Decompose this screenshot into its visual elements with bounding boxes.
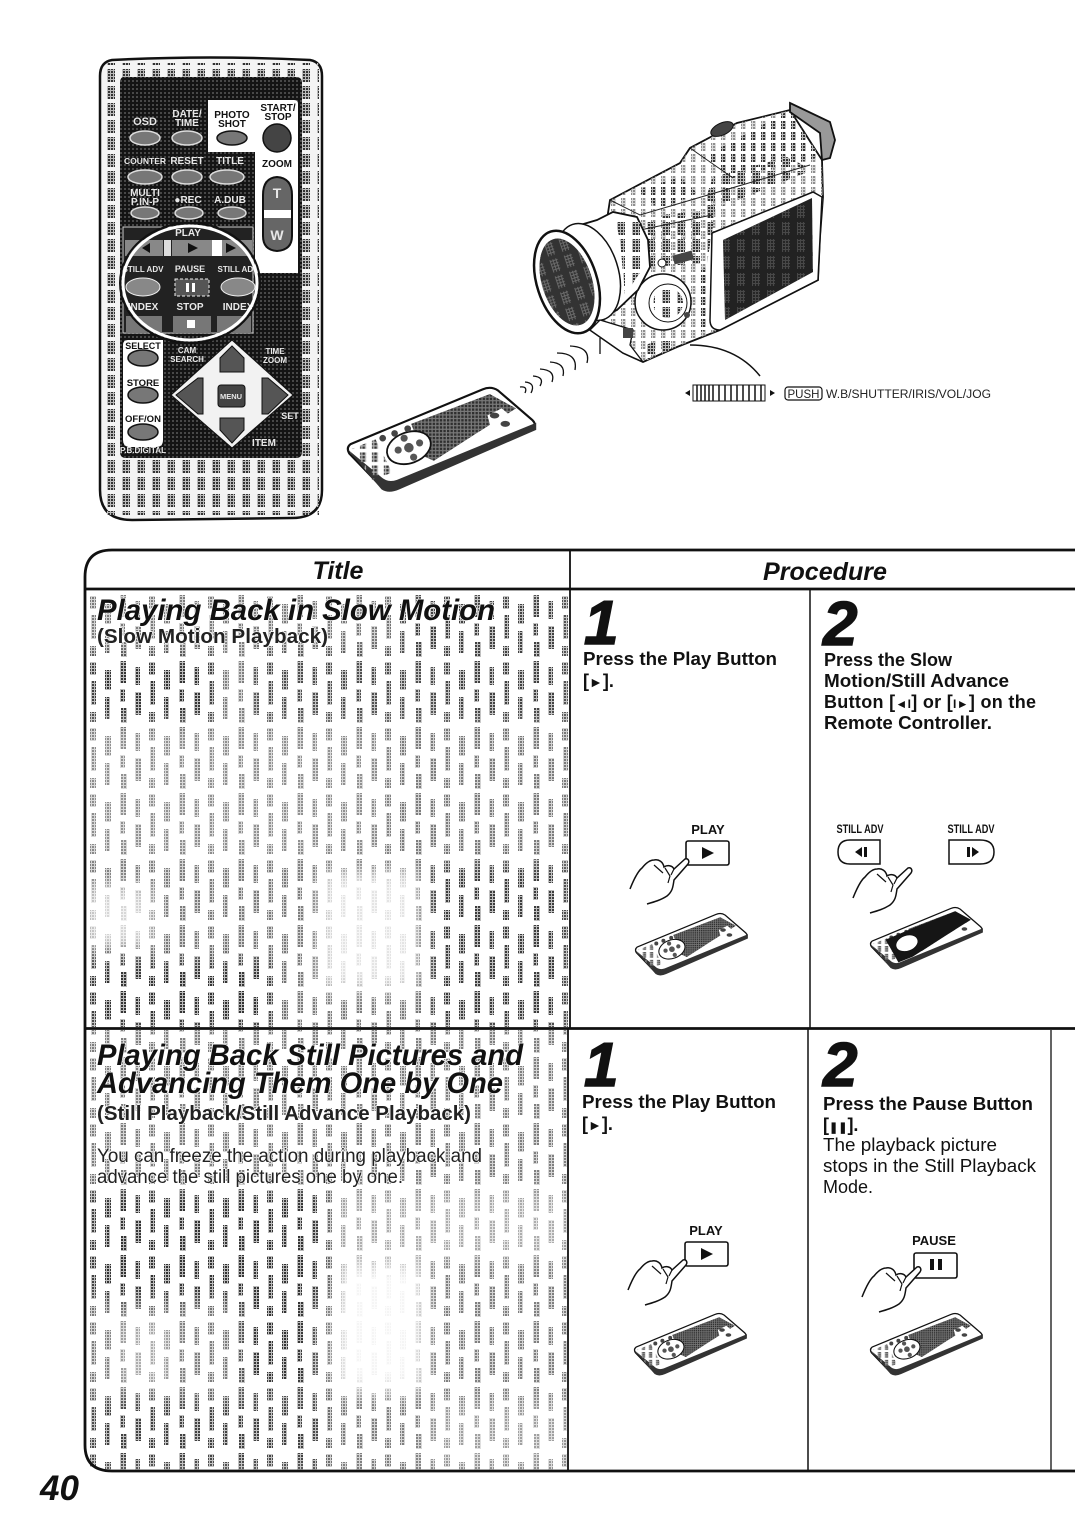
step 1 row 1: [►]. [583, 671, 614, 691]
textured housing [610, 110, 820, 332]
play button with hand, row 2 [628, 1223, 728, 1305]
play button with hand, row 1: PLAY [691, 822, 725, 837]
camcorder illustration [522, 103, 835, 362]
white block: select store off [123, 340, 163, 447]
lens front [522, 222, 612, 342]
function keys: RESET [170, 156, 204, 167]
description text [97, 1146, 482, 1188]
leader line to dial [690, 345, 760, 376]
dark key panel [120, 77, 302, 458]
step 1 row 1: 1 [584, 589, 618, 658]
function keys: OFF/ON [125, 414, 161, 425]
function keys: TIME [265, 347, 285, 356]
step 2 row 2: Mode. [823, 1177, 873, 1197]
lcd screen [710, 192, 822, 330]
function keys [120, 103, 299, 455]
function keys: INDEX [128, 302, 159, 313]
still advance buttons with hand [836, 822, 994, 913]
function keys: SELECT [125, 341, 161, 351]
step 1 row 2 [582, 1031, 776, 1134]
infrared signal arcs [520, 338, 600, 393]
small remote, row 1 step 1 [635, 914, 748, 975]
step 2 row 1: 2 [822, 590, 857, 659]
multi-function dial legend [685, 385, 991, 401]
step 1 row 2: [►]. [582, 1114, 613, 1134]
still advance buttons with hand: STILL ADV [948, 822, 994, 836]
function keys: START/ [260, 103, 296, 114]
step 2 row 2: 2 [822, 1031, 857, 1100]
knob [709, 118, 735, 140]
function keys: SET [281, 411, 299, 421]
play button with hand, row 2: PLAY [689, 1223, 723, 1238]
pause button with hand: PAUSE [912, 1233, 956, 1248]
panel: halftone background row 2 [87, 1030, 567, 1470]
heading: still pictures [96, 1039, 524, 1125]
step 2 row 1: Remote Controller. [824, 713, 992, 733]
header: Title: Title [313, 557, 364, 585]
function keys: CAM [178, 346, 196, 355]
function keys: MULTI [130, 188, 160, 199]
step 2 row 2: The playback picture [823, 1135, 997, 1155]
description text: You can freeze the action during playback and [97, 1146, 482, 1167]
step 2 row 1: Press the Slow [824, 650, 953, 670]
direction diamond pad: MENU [220, 392, 242, 401]
still advance buttons with hand: STILL ADV [836, 822, 884, 836]
function keys: PAUSE [175, 264, 205, 274]
function keys: SHOT [218, 119, 246, 130]
function keys: STORE [127, 378, 159, 389]
playback keys [123, 227, 255, 333]
step 1 row 1 [583, 589, 777, 691]
function keys: COUNTER [124, 156, 166, 166]
pause button with hand [862, 1233, 957, 1312]
function keys: PLAY [175, 228, 201, 239]
function keys: PHOTO [214, 110, 250, 121]
table frame [85, 550, 1075, 1471]
dial label: W.B/SHUTTER/IRIS/VOL/JOG [826, 389, 991, 401]
function keys: INDEX [223, 302, 254, 313]
function keys: STOP [176, 302, 204, 313]
function keys: STOP [264, 112, 292, 123]
bottom grip [590, 320, 677, 362]
dial glyph [685, 385, 775, 401]
function keys: TITLE [216, 156, 244, 167]
function keys: OSD [133, 116, 157, 128]
description text: advance the still pictures one by one. [97, 1167, 403, 1188]
heading: slow motion: (Slow Motion Playback) [97, 626, 328, 648]
remote pointing at camcorder [347, 388, 536, 492]
step 2 row 2: stops in the Still Playback [823, 1156, 1037, 1176]
function keys: STILL ADV [218, 265, 259, 274]
zoom rocker [263, 177, 292, 251]
key ovals [128, 131, 246, 219]
function keys: ITEM [252, 438, 276, 449]
direction diamond pad [171, 340, 293, 448]
remote controller illustration [100, 58, 322, 520]
white block: photo and zoom [208, 100, 298, 273]
viewfinder eyecup [790, 103, 835, 160]
heading: still pictures: (Still Playback/Still Advance Playback) [97, 1103, 471, 1125]
header: Procedure: Procedure [763, 558, 887, 586]
heading: slow motion [97, 594, 495, 648]
panel: halftone background row 1 [87, 591, 568, 1027]
function keys: A.DUB [214, 195, 246, 206]
push badge: PUSH [788, 387, 820, 401]
function keys: SEARCH [170, 355, 204, 364]
remote body [100, 58, 322, 520]
small remote, row 1 step 2 [870, 908, 983, 969]
step 2 row 2: [❚❚]. [823, 1115, 858, 1135]
function keys: TIME [175, 118, 199, 129]
function keys: ZOOM [263, 356, 287, 365]
step 2 row 2: Press the Pause Button [823, 1094, 1033, 1114]
lens barrel [570, 212, 650, 317]
small remote, row 2 step 2 [870, 1314, 983, 1375]
highlight circle [123, 226, 257, 340]
zoom rocker: W [270, 227, 284, 243]
step 1 row 1: Press the Play Button [583, 649, 777, 669]
function keys: ZOOM [262, 159, 292, 170]
function keys: DATE/ [172, 109, 202, 120]
step 2 row 1: Button [◄I] or [I►] on the [824, 692, 1036, 712]
play button with hand, row 1 [630, 822, 729, 904]
small remote, row 2 step 1 [634, 1314, 747, 1375]
step 2 row 2 [822, 1031, 1037, 1197]
function keys: ●REC [174, 195, 202, 206]
step 2 row 1 [822, 590, 1036, 733]
heading: still pictures: Advancing Them One by One [96, 1067, 503, 1100]
step 1 row 2: Press the Play Button [582, 1092, 776, 1112]
function keys: P.IN-P [131, 197, 159, 208]
side dial [635, 251, 694, 330]
camcorder body [590, 110, 823, 362]
heading: still pictures: Playing Back Still Pictures and [97, 1039, 524, 1072]
heading: slow motion: Playing Back in Slow Motion [97, 594, 495, 627]
function keys: P.B.DIGITAL [120, 446, 166, 455]
page number: 40 [39, 1469, 79, 1508]
step 2 row 1: Motion/Still Advance [824, 671, 1009, 691]
zoom rocker: T [273, 185, 282, 201]
step 1 row 2: 1 [584, 1031, 618, 1100]
function keys: STILL ADV [123, 265, 164, 274]
